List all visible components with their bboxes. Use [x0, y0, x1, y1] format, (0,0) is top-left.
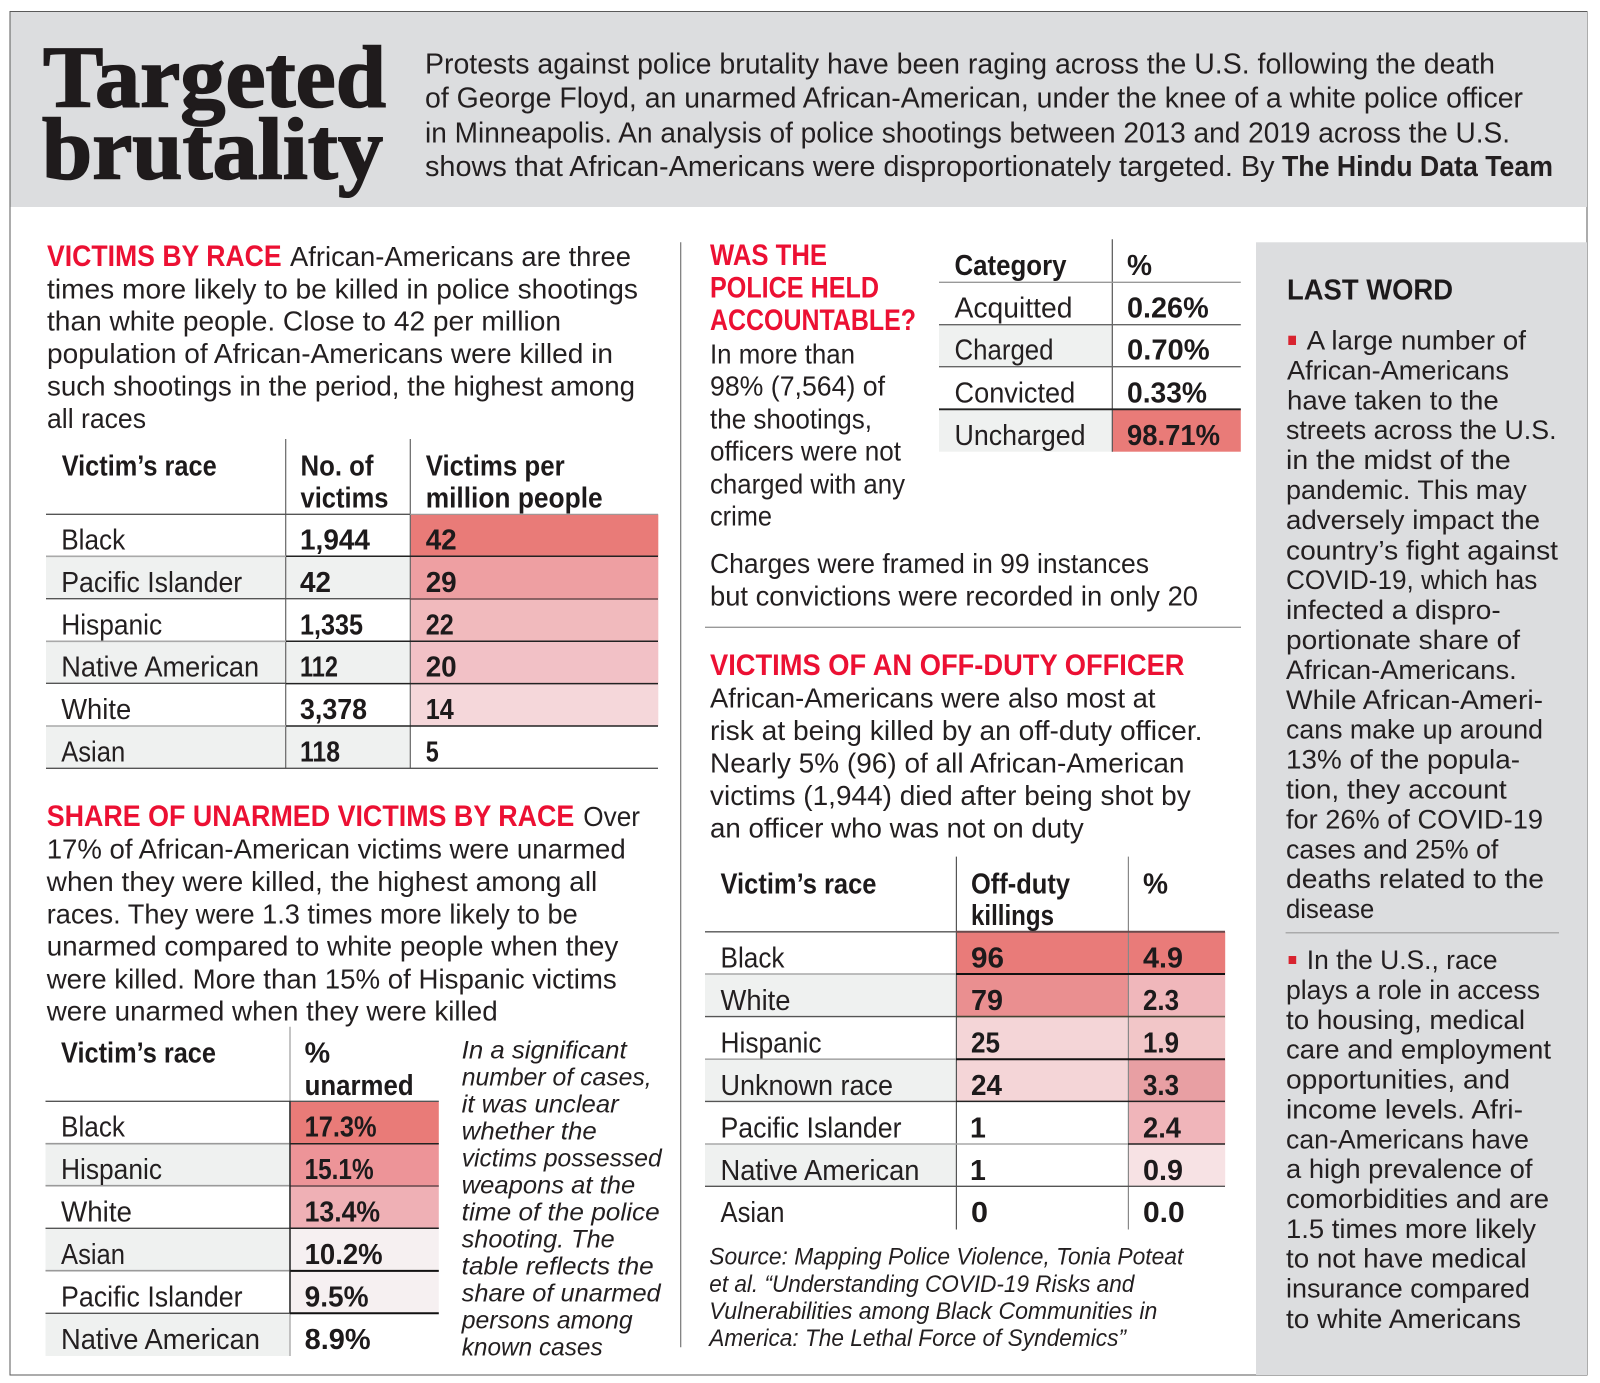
bullet text: pandemic: tion, they account: [1286, 774, 1507, 804]
paragraph: shootings not charged: [710, 338, 905, 532]
icon: red bullet: [1289, 956, 1296, 964]
table: victims by race: Hispanic: [61, 609, 162, 641]
italic note: share of unarmed: [462, 1279, 662, 1307]
source note: Vulnerabilities among Black Communities in: [709, 1298, 1157, 1325]
bullet text: pandemic: streets across the U.S.: [1286, 415, 1556, 445]
table: victims by race: 29: [426, 567, 457, 599]
table: off-duty killings: Unknown race: [720, 1070, 893, 1102]
heading and paragraph: victims by race: such shootings in the period, the highest among: [47, 370, 635, 401]
heading: was the police held accountable: WAS THE: [710, 239, 827, 272]
table: victims by race: 3,378: [300, 694, 367, 726]
table: off-duty killings: Hispanic: [720, 1028, 822, 1060]
panel: share of unarmed victims: [46, 800, 663, 1361]
table: victims by race: 22: [426, 609, 454, 641]
intro text: in Minneapolis. An analysis of police shootings between 2013 and 2019 across the U.S.: [425, 117, 1510, 149]
table: off-duty killings: 3.3: [1143, 1070, 1179, 1102]
bullet text: race and access: a high prevalence of: [1286, 1154, 1533, 1184]
table: victims by race: Victim’s race: [62, 450, 217, 482]
table: off-duty killings: %: [1143, 868, 1168, 900]
table: off-duty killings: 2.4: [1143, 1112, 1181, 1144]
table: percent unarmed: White: [61, 1196, 132, 1228]
table: victims by race: 112: [300, 652, 338, 684]
heading and paragraph: share of unarmed victims: 17% of African-American victims were unarmed: [47, 833, 626, 864]
table: percent unarmed: Native American: [61, 1324, 260, 1356]
paragraph: shootings not charged: crime: [710, 501, 772, 532]
bullet text: race and access: plays a role in access: [1286, 975, 1540, 1005]
table: category: %: [1127, 250, 1152, 282]
table: category: Category: [954, 250, 1067, 282]
intro text: [425, 48, 1553, 183]
italic note: shooting. The: [462, 1225, 615, 1253]
table: off-duty killings: 1.9: [1143, 1028, 1179, 1060]
panel: last word: [1256, 242, 1587, 1375]
heading and paragraph: share of unarmed victims: were unarmed when they were killed: [46, 996, 498, 1027]
heading and paragraph: share of unarmed victims: SHARE OF UNARMED VICTIMS BY RACE: [47, 800, 574, 833]
table: off-duty killings: Pacific Islander: [720, 1112, 902, 1144]
paragraph: off-duty officer: risk at being killed by an off-duty officer.: [710, 715, 1202, 746]
bullet text: pandemic: disease: [1286, 894, 1374, 924]
bullet text: race and access: to not have medical: [1286, 1244, 1527, 1274]
bullet text: race and access: 1.5 times more likely: [1286, 1214, 1537, 1244]
heading and paragraph: share of unarmed victims: when they were killed, the highest among all: [46, 866, 597, 897]
heading: was the police held accountable: ACCOUNTABLE?: [710, 304, 916, 337]
table: off-duty killings: Native American: [720, 1155, 920, 1187]
heading: was the police held accountable: [710, 239, 916, 337]
table: off-duty killings: Off-duty: [971, 868, 1070, 900]
italic note: weapons at the: [462, 1171, 635, 1199]
table: off-duty killings: 0.9: [1143, 1155, 1183, 1187]
table: category: 98.71%: [1127, 420, 1220, 452]
paragraph: off-duty officer: [710, 682, 1202, 843]
bullet text: pandemic: in the midst of the: [1286, 445, 1511, 475]
bullet text: pandemic: pandemic. This may: [1286, 475, 1527, 505]
heading and paragraph: victims by race: [47, 240, 638, 434]
bullet text: race and access: care and employment: [1286, 1035, 1552, 1065]
bullet text: pandemic: have taken to the: [1287, 385, 1499, 415]
table: victims by race: Native American: [61, 652, 259, 684]
table: off-duty killings: White: [720, 985, 790, 1017]
table: off-duty killings: 25: [971, 1028, 1000, 1060]
italic note: In a significant: [462, 1036, 628, 1064]
table: victims by race: 118: [300, 737, 340, 769]
paragraph: charges framed: Charges were framed in 99 instances: [710, 548, 1149, 579]
bullet text: race and access: comorbidities and are: [1286, 1184, 1549, 1214]
table: percent unarmed: Black: [61, 1112, 126, 1144]
paragraph: shootings not charged: charged with any: [710, 468, 905, 499]
bullet text: pandemic: COVID-19, which has: [1286, 565, 1537, 595]
table: percent unarmed: 8.9%: [305, 1324, 371, 1356]
table: victims by race: Victims per: [426, 450, 565, 482]
table: victims by race: White: [61, 694, 131, 726]
bullet text: race and access: In the U.S., race: [1307, 945, 1498, 975]
bullet text: race and access: to housing, medical: [1286, 1005, 1525, 1035]
heading and paragraph: victims by race: than white people. Close to 42 per million: [47, 306, 561, 337]
table: victims by race: Black: [61, 525, 126, 557]
paragraph: shootings not charged: the shootings,: [710, 403, 872, 434]
heading and paragraph: share of unarmed victims: unarmed compared to white people when they: [47, 931, 618, 962]
heading: victims of an off-duty officer: VICTIMS OF AN OFF-DUTY OFFICER: [710, 649, 1184, 682]
table: victims by race: [46, 439, 658, 769]
paragraph: off-duty officer: Nearly 5% (96) of all African-American: [710, 748, 1184, 779]
title: Targeted: [43, 30, 386, 127]
bullet text: pandemic: [1286, 326, 1559, 924]
table: victims by race: 1,335: [300, 609, 363, 641]
bullet text: race and access: to white Americans: [1286, 1304, 1521, 1334]
table: category: Charged: [954, 334, 1054, 366]
source note: Source: Mapping Police Violence, Tonia Poteat: [709, 1244, 1185, 1271]
paragraph: shootings not charged: In more than: [710, 338, 855, 369]
table: victims by race: Asian: [61, 737, 125, 769]
heading and paragraph: share of unarmed victims: were killed. More than 15% of Hispanic victims: [46, 963, 617, 994]
italic note: number of cases,: [462, 1063, 652, 1091]
table: off-duty killings: Victim’s race: [720, 868, 876, 900]
table: victims by race: 42: [426, 525, 457, 557]
paragraph: off-duty officer: an officer who was not on duty: [710, 812, 1084, 843]
bullet text: pandemic: deaths related to the: [1286, 864, 1544, 894]
panel: off-duty officer: [705, 649, 1225, 1352]
table: off-duty killings: 1: [970, 1155, 986, 1187]
source note: America: The Lethal Force of Syndemics”: [707, 1325, 1127, 1352]
table: percent unarmed: Asian: [61, 1239, 125, 1271]
table: off-duty killings: 2.3: [1143, 985, 1179, 1017]
paragraph: shootings not charged: 98% (7,564) of: [710, 371, 885, 402]
bullet text: pandemic: infected a dispro-: [1286, 595, 1501, 625]
heading and paragraph: victims by race: African-Americans are three: [290, 241, 631, 272]
table: victims by race: 42: [300, 567, 331, 599]
panel: police accountability: [710, 239, 1241, 612]
heading and paragraph: share of unarmed victims: Over: [583, 801, 640, 832]
table: category: Acquitted: [954, 292, 1072, 324]
table: off-duty killings: 0: [971, 1197, 988, 1229]
table: off-duty killings: [705, 857, 1225, 1230]
table: victims by race: 14: [426, 694, 454, 726]
bullet text: pandemic: cans make up around: [1286, 715, 1543, 745]
table: percent unarmed: %: [305, 1038, 330, 1070]
bullet text: race and access: income levels. Afri-: [1286, 1094, 1523, 1124]
italic note: it was unclear: [462, 1090, 620, 1118]
bullet text: pandemic: for 26% of COVID-19: [1286, 804, 1543, 834]
table: off-duty killings: 79: [971, 985, 1003, 1017]
intro text: Protests against police brutality have been raging across the U.S. following the death: [425, 48, 1495, 80]
table: victims by race: victims: [300, 482, 388, 514]
table: off-duty killings: killings: [971, 900, 1054, 932]
italic note: persons among: [461, 1306, 633, 1334]
table: off-duty killings: 0.0: [1143, 1197, 1185, 1229]
table: off-duty killings: Black: [720, 943, 785, 975]
table: percent unarmed: [46, 1027, 439, 1356]
bullet text: pandemic: African-Americans: [1287, 355, 1509, 385]
paragraph: charges framed: but convictions were recorded in only 20: [710, 581, 1198, 612]
bullet text: pandemic: country’s fight against: [1286, 535, 1559, 565]
bullet text: race and access: insurance compared: [1286, 1274, 1530, 1304]
table: percent unarmed: 13.4%: [305, 1196, 380, 1228]
table: category: 0.70%: [1127, 334, 1210, 366]
italic note: time of the police: [462, 1198, 660, 1226]
bullet text: pandemic: portionate share of: [1286, 625, 1521, 655]
table: percent unarmed: 9.5%: [305, 1282, 369, 1314]
table: off-duty killings: 96: [971, 943, 1004, 975]
bullet text: pandemic: While African-Ameri-: [1286, 685, 1543, 715]
paragraph: off-duty officer: African-Americans were also most at: [710, 682, 1156, 713]
paragraph: shootings not charged: officers were not: [710, 436, 901, 467]
table: percent unarmed: Victim’s race: [61, 1038, 216, 1070]
bullet text: pandemic: cases and 25% of: [1286, 834, 1499, 864]
bullet text: pandemic: 13% of the popula-: [1286, 745, 1520, 775]
table: victims by race: 5: [426, 737, 439, 769]
italic note: [461, 1036, 663, 1361]
bullet text: race and access: [1286, 945, 1552, 1334]
table: victims by race: No. of: [300, 450, 374, 482]
table: percent unarmed: 15.1%: [305, 1154, 374, 1186]
icon: red bullet: [1288, 336, 1296, 345]
heading and paragraph: share of unarmed victims: races. They were 1.3 times more likely to be: [47, 898, 578, 929]
title: [42, 30, 386, 198]
table: off-duty killings: Asian: [720, 1197, 784, 1229]
table: victims by race: 20: [426, 652, 457, 684]
title: brutality: [42, 101, 383, 198]
bullet text: pandemic: African-Americans.: [1286, 655, 1517, 685]
source note: [707, 1244, 1185, 1352]
intro text: shows that African-Americans were disproportionately targeted. By: [425, 151, 1275, 183]
header band: [10, 12, 1587, 207]
table: percent unarmed: 10.2%: [305, 1239, 383, 1271]
bullet text: pandemic: adversely impact the: [1286, 505, 1540, 535]
bullet text: pandemic: A large number of: [1307, 326, 1527, 356]
italic note: whether the: [462, 1117, 597, 1145]
table: category: Convicted: [954, 377, 1075, 409]
heading and paragraph: victims by race: all races: [47, 403, 146, 434]
table: victims by race: 1,944: [300, 525, 370, 557]
bullet text: race and access: opportunities, and: [1286, 1065, 1510, 1095]
bullet text: race and access: can-Americans have: [1286, 1124, 1529, 1154]
heading and paragraph: victims by race: population of African-Americans were killed in: [47, 338, 613, 369]
table: off-duty killings: 1: [970, 1112, 986, 1144]
italic note: table reflects the: [462, 1252, 654, 1280]
intro text: The Hindu Data Team: [1282, 151, 1553, 183]
source note: et al. “Understanding COVID-19 Risks and: [709, 1271, 1135, 1298]
heading and paragraph: victims by race: VICTIMS BY RACE: [47, 240, 282, 273]
table: category: Uncharged: [954, 420, 1086, 452]
table: percent unarmed: 17.3%: [305, 1112, 377, 1144]
paragraph: off-duty officer: victims (1,944) died after being shot by: [710, 780, 1191, 811]
heading: was the police held accountable: POLICE HELD: [710, 272, 879, 305]
table: percent unarmed: unarmed: [305, 1070, 414, 1102]
paragraph: charges framed: [710, 548, 1198, 612]
heading and paragraph: share of unarmed victims: [46, 800, 640, 1027]
table: percent unarmed: Pacific Islander: [61, 1282, 243, 1314]
table: off-duty killings: 4.9: [1143, 943, 1183, 975]
table: off-duty killings: 24: [971, 1070, 1002, 1102]
heading and paragraph: victims by race: times more likely to be killed in police shootings: [47, 273, 638, 304]
intro text: of George Floyd, an unarmed African-American, under the knee of a white police officer: [425, 83, 1523, 115]
table: category: 0.33%: [1127, 377, 1207, 409]
italic note: known cases: [462, 1333, 603, 1361]
last word heading: LAST WORD: [1287, 274, 1453, 306]
table: category: [939, 239, 1241, 452]
panel: victims by race: [46, 240, 658, 769]
table: percent unarmed: Hispanic: [61, 1154, 162, 1186]
table: victims by race: Pacific Islander: [61, 567, 243, 599]
table: victims by race: million people: [426, 482, 603, 514]
italic note: victims possessed: [462, 1144, 663, 1172]
table: category: 0.26%: [1127, 292, 1209, 324]
